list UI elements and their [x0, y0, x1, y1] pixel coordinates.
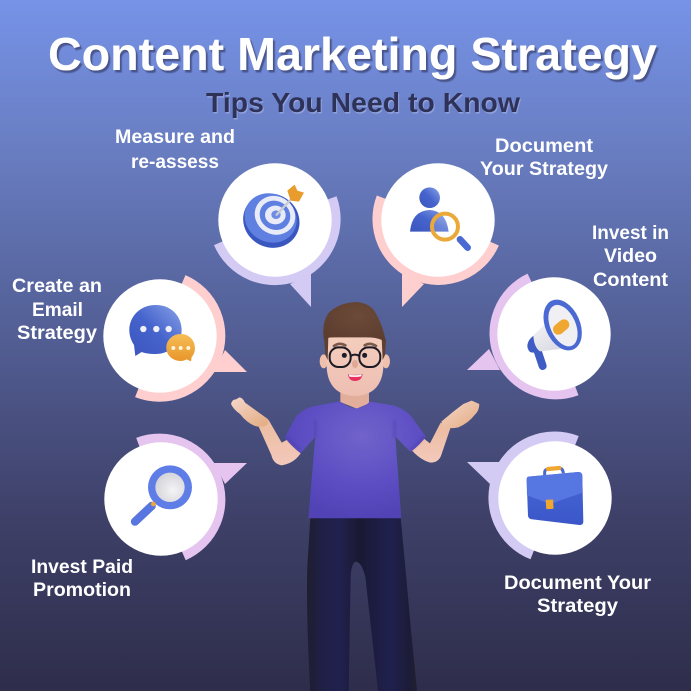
subtitle: Tips You Need to Know — [206, 87, 520, 118]
speech bubble ring — [378, 198, 493, 307]
label: Invest Paid — [31, 557, 133, 578]
white circle — [103, 279, 217, 393]
white circle — [104, 442, 218, 556]
shirt — [285, 401, 426, 518]
white circle — [218, 163, 332, 277]
eyes — [342, 353, 367, 358]
side hair — [324, 337, 386, 360]
ears — [320, 354, 390, 368]
white circle — [381, 163, 495, 277]
glasses — [330, 347, 380, 367]
panel: document your strategy (bottom) — [467, 437, 652, 617]
mouth — [348, 374, 363, 381]
speech bubble ring — [138, 440, 247, 555]
panel: create an email strategy — [12, 276, 247, 396]
label: Invest in — [592, 223, 669, 244]
left arm — [259, 420, 302, 465]
neck — [340, 390, 369, 409]
speech bubble ring — [467, 279, 576, 393]
nose — [352, 360, 358, 368]
icon: person with magnifier — [410, 187, 468, 248]
speech bubble ring — [137, 281, 247, 396]
eyebrows — [334, 344, 376, 346]
icon: megaphone — [527, 294, 589, 366]
pants — [307, 517, 417, 691]
title: Content Marketing Strategy — [48, 28, 657, 80]
label: Measure and — [115, 127, 235, 148]
label: Document — [495, 136, 594, 157]
panel: invest in video content — [467, 223, 669, 393]
label: Content — [593, 270, 669, 291]
right hand — [441, 401, 479, 428]
label: Document Your — [504, 573, 652, 594]
icon: target with arrow — [233, 183, 309, 258]
label: Email — [32, 300, 83, 321]
white circle — [498, 441, 612, 555]
left hand — [231, 397, 268, 427]
speech bubble ring — [467, 437, 576, 554]
label: Create an — [12, 276, 102, 297]
icon: briefcase — [527, 468, 583, 525]
shirt shadows — [286, 420, 425, 451]
hair — [323, 302, 386, 343]
face — [327, 337, 383, 396]
label: Promotion — [33, 580, 131, 601]
label: Strategy — [17, 323, 97, 344]
label: Video — [604, 246, 657, 267]
panel: measure and re-assess — [115, 127, 335, 307]
label: Your Strategy — [480, 159, 608, 180]
icon: chat bubbles — [129, 305, 195, 361]
panel: invest paid promotion — [31, 440, 247, 601]
character: man in purple shirt — [231, 302, 479, 691]
label: re-assess — [131, 152, 219, 173]
white circle — [497, 277, 611, 391]
label: Strategy — [537, 596, 618, 617]
panel: document your strategy (top) — [378, 136, 608, 307]
speech bubble ring — [220, 198, 335, 307]
right arm — [410, 423, 451, 463]
icon: magnifying glass — [135, 465, 192, 522]
